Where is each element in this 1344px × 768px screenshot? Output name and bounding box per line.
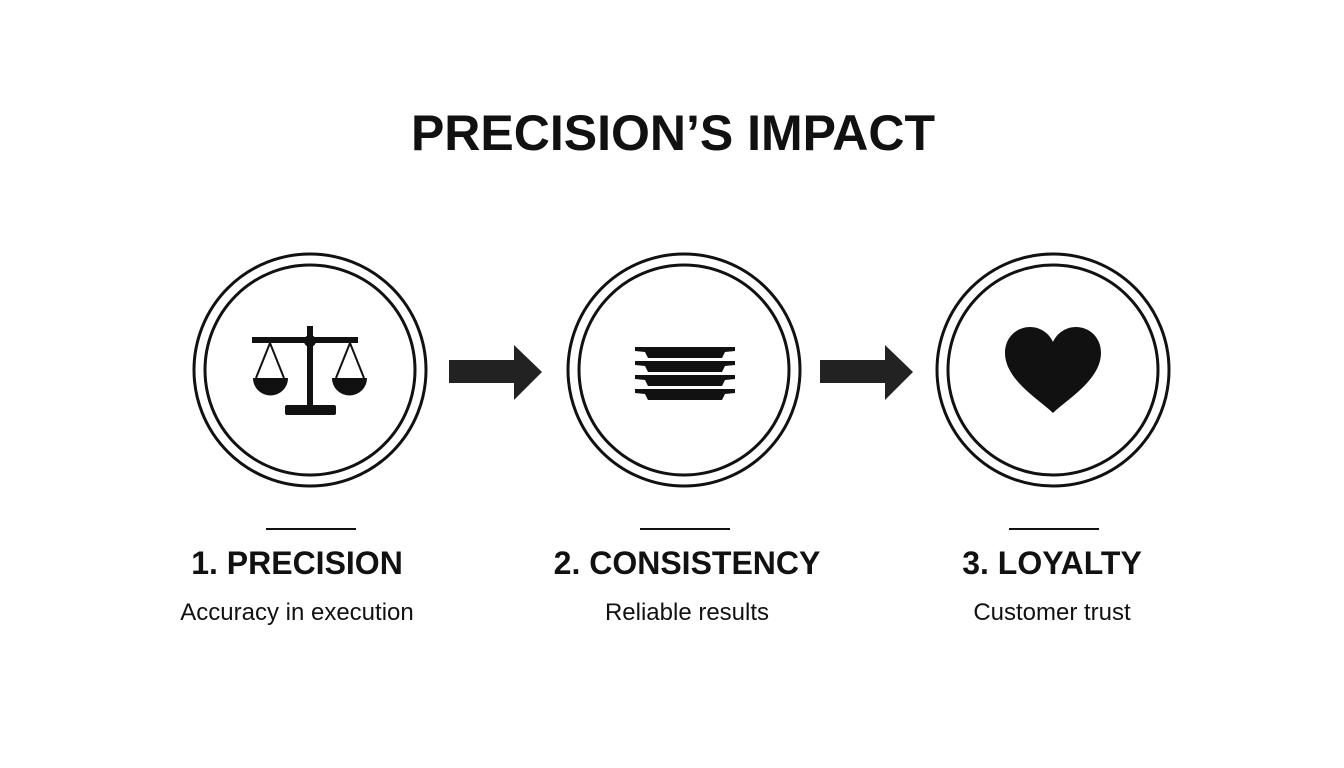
label 1: 1. PRECISION xyxy=(191,545,403,581)
label 3: Customer trust xyxy=(973,599,1131,626)
label 2: 2. CONSISTENCY xyxy=(554,545,820,581)
label 1: Accuracy in execution xyxy=(180,599,414,626)
label 2 xyxy=(554,545,820,626)
arrow 2 xyxy=(820,345,913,400)
arrow 1 xyxy=(449,345,542,400)
label 3: 3. LOYALTY xyxy=(962,545,1142,581)
label 2: Reliable results xyxy=(605,599,769,626)
step 1 circle with scale icon xyxy=(194,254,426,486)
title: PRECISION’S IMPACT xyxy=(411,105,935,161)
label 3 xyxy=(962,545,1142,626)
label 1 xyxy=(180,545,414,626)
step 3 circle with heart icon xyxy=(937,254,1169,486)
step 2 circle with stacked plates icon xyxy=(568,254,800,486)
